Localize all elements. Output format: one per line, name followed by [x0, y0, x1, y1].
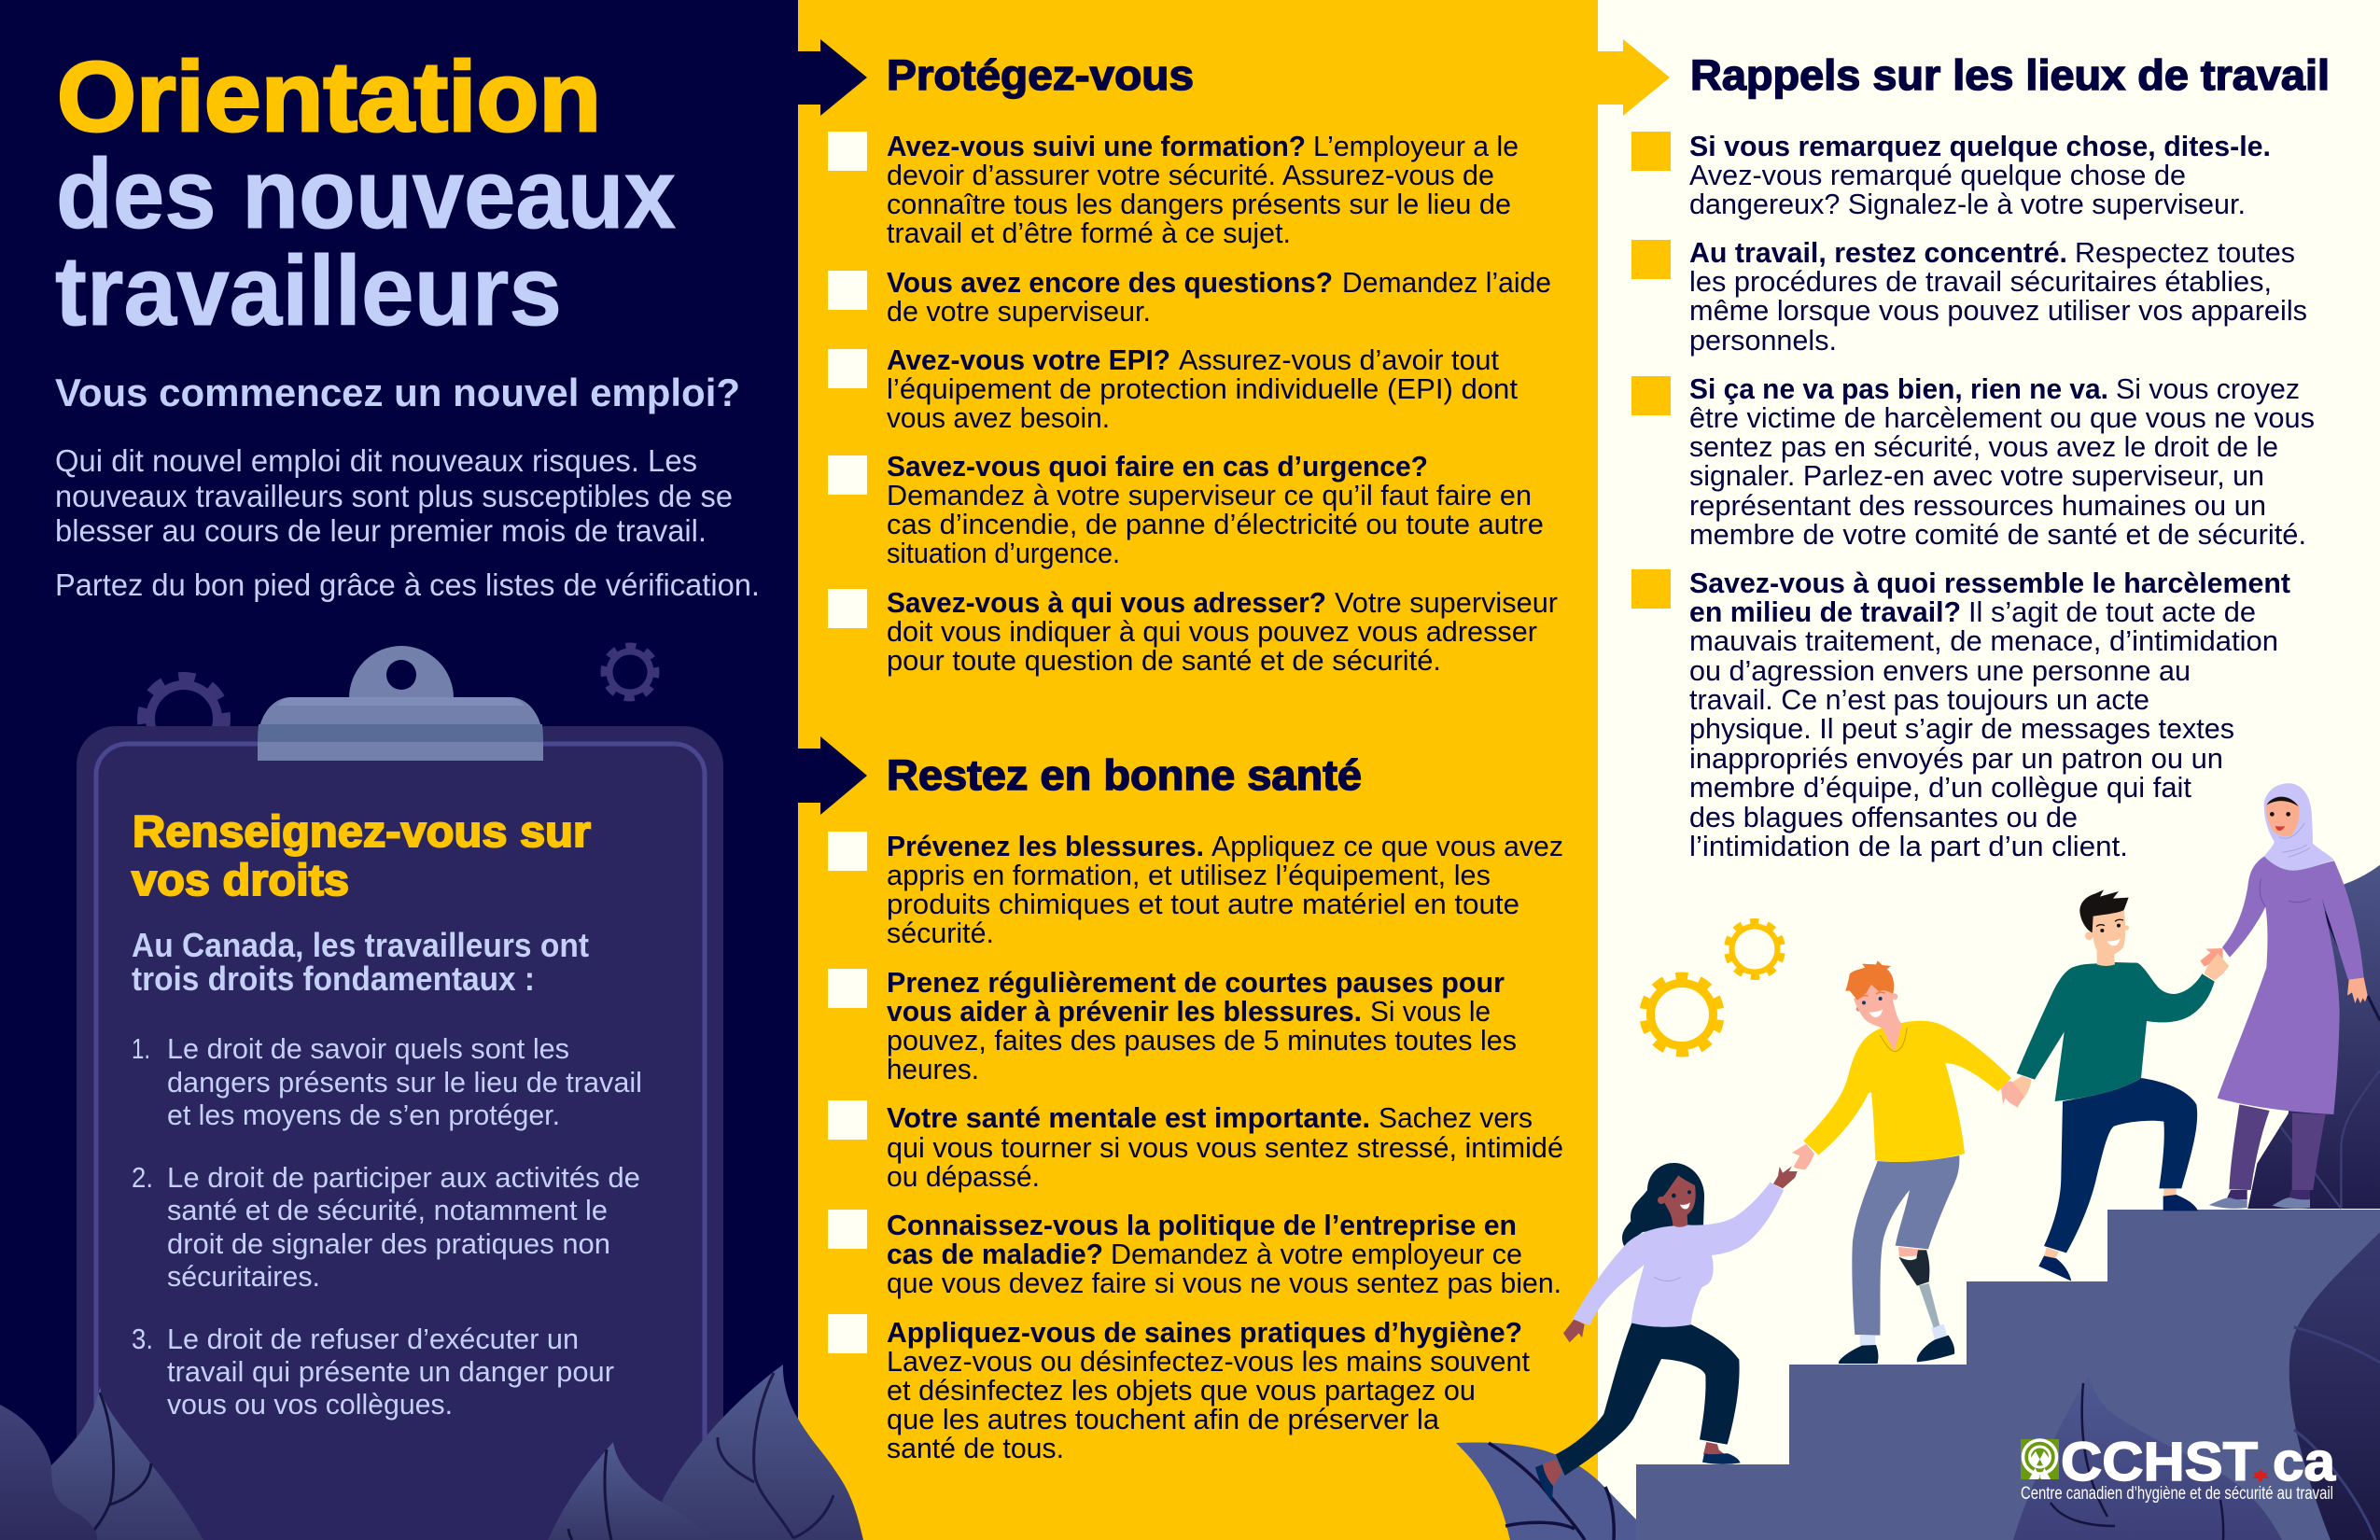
list item: right to refuse: travail qui présente un danger pour: [167, 1355, 614, 1388]
person: woman in lilac sweater: [1535, 1163, 1798, 1502]
leaf: front behind logo: [2013, 1374, 2282, 1540]
heading: know your rights: vos droits: [132, 855, 349, 904]
item: stay focused: Au travail, restez concentré.: [1689, 236, 2067, 269]
item: hygiene: santé de tous.: [887, 1432, 1064, 1464]
item: contact: Votre superviseur: [1335, 586, 1558, 619]
leaves: bottom centre: [548, 1365, 863, 1540]
list item: right to refuse: 3.: [132, 1323, 153, 1355]
item: hygiene: et désinfectez les objets que vous partagez ou: [887, 1374, 1476, 1407]
item: emergency: Savez-vous quoi faire en cas d’urgence?: [887, 450, 1428, 483]
item: emergency: Demandez à votre superviseur ce qu’il faut faire en: [887, 479, 1532, 511]
list item: right to participate: Le droit de participer aux activités de: [167, 1161, 640, 1194]
item: hygiene: Appliquez-vous de saines pratiques d’hygiène?: [887, 1316, 1522, 1349]
item: something wrong: signaler. Parlez-en avec votre superviseur, un: [1689, 459, 2264, 492]
item: PPE: l’équipement de protection individuelle (EPI) dont: [887, 372, 1518, 405]
leaf: behind woman in hijab: [2247, 865, 2380, 1209]
item: speak up: Avez-vous remarqué quelque chose de: [1689, 159, 2186, 191]
item: injuries: Prévenez les blessures.: [887, 830, 1204, 862]
logo: CCHST: [2021, 1432, 2336, 1504]
item: breaks: pouvez, faites des pauses de 5 minutes toutes les: [887, 1024, 1517, 1057]
icon: large yellow gear: [1639, 972, 1725, 1057]
list item: right to know: 1.: [132, 1032, 150, 1065]
clipboard board: [77, 726, 723, 1540]
text block: introduction: Partez du bon pied grâce à ces listes de vérification.: [55, 567, 760, 602]
person: man in yellow sweater: [1792, 960, 2023, 1364]
item: training: [828, 130, 1519, 249]
item: emergency: cas d’incendie, de panne d’électricité ou toute autre: [887, 508, 1544, 540]
arrow: protect yourself: [798, 39, 867, 116]
item: harassment: Il s’agit de tout acte de: [1968, 595, 2256, 628]
list item: right to participate: sécuritaires.: [167, 1260, 320, 1293]
leaf: lower left of stairs: [1456, 1442, 1636, 1540]
item: hygiene: que les autres touchent afin de préserver la: [887, 1403, 1440, 1435]
item: injuries: Appliquez ce que vous avez: [1211, 830, 1563, 862]
item: questions: Vous avez encore des questions?: [887, 266, 1333, 299]
item: stay focused: [1631, 236, 2307, 357]
item: PPE: [828, 343, 1518, 434]
item: injuries: [828, 830, 1563, 949]
item: contact: Savez-vous à qui vous adresser?: [887, 586, 1326, 619]
list item: right to participate: [132, 1161, 640, 1293]
arrow: workplace reminders: [1598, 39, 1670, 116]
item: something wrong: Si ça ne va pas bien, rien ne va.: [1689, 372, 2108, 405]
item: something wrong: [1631, 372, 2315, 551]
item: stay focused: personnels.: [1689, 324, 1837, 357]
heading: know your rights: Renseignez-vous sur: [133, 806, 591, 856]
item: sick policy: Connaissez-vous la politique de l’entreprise en: [887, 1209, 1517, 1241]
logo suffix: ca: [2273, 1432, 2336, 1492]
item: harassment: [1631, 567, 2290, 862]
item: training: travail et d’être formé à ce sujet.: [887, 217, 1291, 249]
stairs: [1636, 1210, 2380, 1540]
item: harassment: physique. Il peut s’agir de messages textes: [1689, 712, 2234, 745]
item: harassment: Savez-vous à quoi ressemble le harcèlement: [1689, 567, 2290, 599]
item: injuries: produits chimiques et tout autre matériel en toute: [887, 888, 1519, 920]
title: Orientation: [57, 42, 601, 152]
item: emergency: [828, 450, 1544, 569]
list item: right to participate: santé et de sécurité, notamment le: [167, 1194, 608, 1226]
item: injuries: sécurité.: [887, 917, 994, 949]
text block: introduction: Qui dit nouvel emploi dit nouveaux risques. Les: [55, 443, 697, 478]
item: questions: [828, 266, 1551, 328]
logo icon: [2021, 1439, 2059, 1479]
clipboard clip: [258, 646, 543, 761]
icon: right gear: [600, 642, 660, 702]
leaves: bottom left: [0, 1387, 203, 1540]
item: questions: Demandez l’aide: [1342, 266, 1551, 299]
panel: yellow background: [798, 0, 1598, 1540]
leaf: dark right over stairs: [2289, 1232, 2380, 1540]
text block: three rights intro: Au Canada, les travailleurs ont: [132, 926, 589, 964]
item: something wrong: être victime de harcèlement ou que vous ne vous: [1689, 401, 2315, 434]
heading: protect yourself: Protégez-vous: [887, 51, 1194, 99]
item: emergency: situation d’urgence.: [887, 537, 1120, 569]
item: contact: [828, 586, 1558, 677]
item: something wrong: représentant des ressources humaines ou un: [1689, 489, 2266, 522]
person: man in green sweater: [2011, 889, 2229, 1281]
item: training: Avez-vous suivi une formation?: [887, 130, 1306, 162]
item: mental health: qui vous tourner si vous vous sentez stressé, intimidé: [887, 1131, 1563, 1164]
heading: workplace reminders: Rappels sur les lieux de travail: [1690, 51, 2330, 99]
item: sick policy: Demandez à votre employeur ce: [1111, 1238, 1522, 1270]
item: training: connaître tous les dangers présents sur le lieu de: [887, 188, 1511, 220]
item: speak up: Si vous remarquez quelque chose, dites-le.: [1689, 130, 2271, 162]
item: sick policy: que vous devez faire si vous ne vous sentez pas bien.: [887, 1267, 1561, 1299]
item: PPE: vous avez besoin.: [887, 401, 1110, 434]
item: harassment: en milieu de travail?: [1689, 595, 1961, 628]
checklist: stay healthy: [828, 830, 1563, 1464]
item: training: L’employeur a le: [1313, 130, 1519, 162]
text block: introduction: [55, 443, 760, 602]
text block: three rights intro: [132, 926, 589, 998]
item: something wrong: Si vous croyez: [2116, 372, 2300, 405]
list item: right to know: Le droit de savoir quels sont les: [167, 1032, 569, 1065]
item: questions: de votre superviseur.: [887, 295, 1151, 328]
list item: right to participate: 2.: [132, 1161, 153, 1194]
arrow: stay healthy: [798, 736, 867, 815]
person: woman in hijab: [2200, 783, 2368, 1209]
item: sick policy: cas de maladie?: [887, 1238, 1103, 1270]
item: something wrong: membre de votre comité de santé et de sécurité.: [1689, 518, 2306, 551]
list item: right to participate: droit de signaler des pratiques non: [167, 1227, 610, 1260]
item: stay focused: les procédures de travail sécuritaires établies,: [1689, 265, 2272, 298]
item: mental health: ou dépassé.: [887, 1160, 1040, 1193]
panel: navy background: [0, 0, 798, 1540]
item: training: devoir d’assurer votre sécurité. Assurez-vous de: [887, 159, 1494, 191]
item: speak up: [1631, 130, 2271, 220]
item: breaks: heures.: [887, 1053, 979, 1085]
icon: left gear: [136, 671, 231, 766]
item: mental health: Sachez vers: [1379, 1101, 1533, 1134]
clipboard inner outline: [96, 744, 705, 1540]
panel: clipboard: [77, 646, 723, 1540]
title: des nouveaux: [56, 139, 676, 249]
item: contact: doit vous indiquer à qui vous pouvez vous adresser: [887, 615, 1537, 648]
item: harassment: inappropriés envoyés par un patron ou un: [1689, 742, 2223, 775]
item: hygiene: Lavez-vous ou désinfectez-vous les mains souvent: [887, 1345, 1530, 1378]
item: injuries: appris en formation, et utilisez l’équipement, les: [887, 859, 1491, 891]
item: breaks: [828, 966, 1517, 1085]
item: mental health: [828, 1100, 1563, 1193]
subheading: new job question: Vous commencez un nouvel emploi?: [55, 371, 740, 414]
item: breaks: Prenez régulièrement de courtes pauses pour: [887, 966, 1505, 999]
list item: right to refuse: vous ou vos collègues.: [167, 1388, 453, 1421]
item: speak up: dangereux? Signalez-le à votre superviseur.: [1689, 188, 2246, 220]
item: mental health: Votre santé mentale est importante.: [887, 1101, 1370, 1134]
item: harassment: mauvais traitement, de menace, d’intimidation: [1689, 624, 2278, 657]
item: harassment: des blagues offensantes ou de: [1689, 801, 2078, 833]
text block: introduction: blesser au cours de leur premier mois de travail.: [55, 513, 707, 548]
item: something wrong: sentez pas en sécurité, vous avez le droit de le: [1689, 430, 2278, 463]
item: harassment: ou d’agression envers une personne au: [1689, 654, 2191, 687]
icon: maple leaf: [2252, 1469, 2269, 1481]
item: stay focused: même lorsque vous pouvez utiliser vos appareils: [1689, 294, 2307, 327]
heading: know your rights: [132, 806, 591, 904]
checklist: protect yourself: [828, 130, 1558, 677]
item: harassment: l’intimidation de la part d’un client.: [1689, 830, 2128, 862]
list item: right to know: et les moyens de s’en protéger.: [167, 1099, 560, 1131]
list item: right to know: [132, 1032, 642, 1131]
text block: introduction: nouveaux travailleurs sont plus susceptibles de se: [55, 479, 733, 513]
title: [55, 42, 676, 346]
item: sick policy: [828, 1209, 1561, 1299]
text block: three rights intro: trois droits fondamentaux :: [132, 959, 535, 998]
list item: right to refuse: [132, 1323, 614, 1421]
item: PPE: Assurez-vous d’avoir tout: [1179, 343, 1499, 376]
logo wordmark: CCHST: [2061, 1432, 2258, 1492]
checklist: workplace reminders: [1631, 130, 2315, 862]
item: PPE: Avez-vous votre EPI?: [887, 343, 1170, 376]
item: harassment: travail. Ce n’est pas toujours un acte: [1689, 683, 2149, 716]
panel: cream background: [1598, 0, 2380, 1540]
heading: stay healthy: Restez en bonne santé: [887, 751, 1362, 799]
title: travailleurs: [55, 236, 562, 346]
item: harassment: membre d’équipe, d’un collègue qui fait: [1689, 771, 2191, 804]
icon: small yellow gear: [1724, 918, 1785, 980]
list item: right to know: dangers présents sur le lieu de travail: [167, 1066, 642, 1099]
item: hygiene: [828, 1314, 1530, 1464]
item: contact: pour toute question de santé et de sécurité.: [887, 644, 1441, 677]
item: breaks: Si vous le: [1370, 995, 1491, 1028]
list item: right to refuse: Le droit de refuser d’exécuter un: [167, 1323, 579, 1355]
item: stay focused: Respectez toutes: [2075, 236, 2295, 269]
item: breaks: vous aider à prévenir les blessures.: [887, 995, 1362, 1028]
